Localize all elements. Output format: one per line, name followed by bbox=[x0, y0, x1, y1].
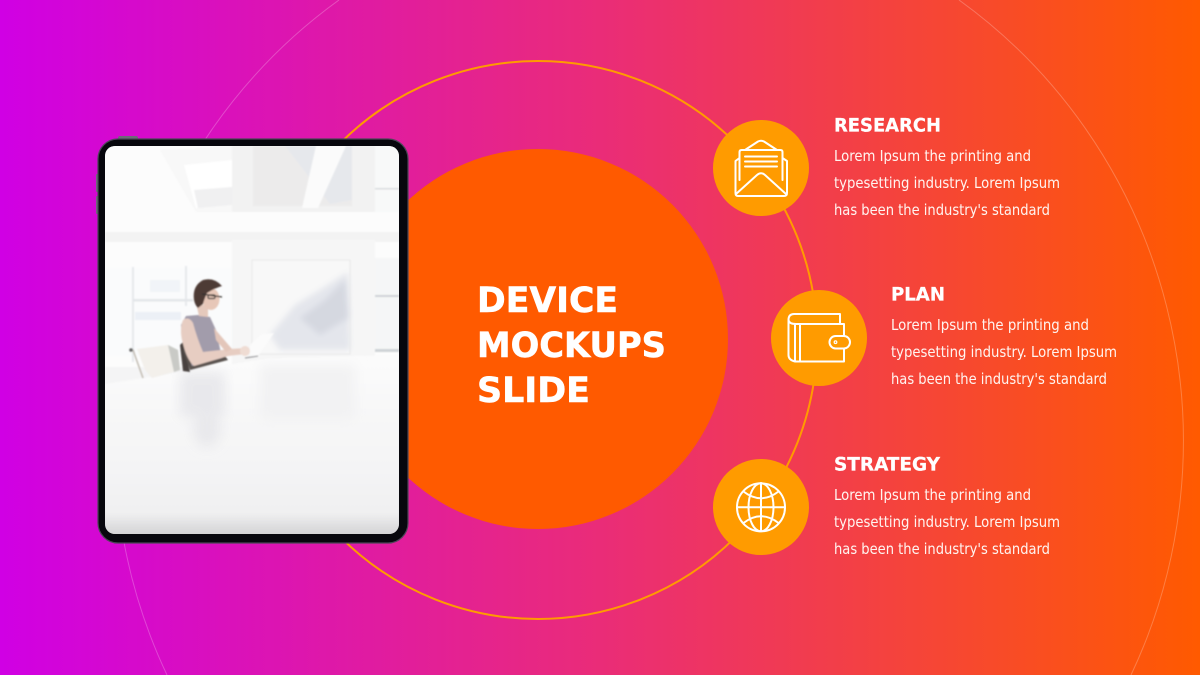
text: strategy description: Lorem Ipsum the printing and bbox=[834, 487, 1031, 504]
reflection on table bbox=[180, 372, 225, 447]
text: plan description: Lorem Ipsum the printing and bbox=[891, 317, 1089, 334]
text: strategy description: has been the industry's standard bbox=[834, 541, 1050, 558]
ceiling bbox=[105, 146, 115, 156]
central orange circle bbox=[348, 149, 728, 529]
chair bbox=[129, 345, 180, 378]
heading: strategy: STRATEGY bbox=[834, 454, 941, 476]
icon: wallet bbox=[771, 290, 867, 386]
step: plan bbox=[771, 284, 1117, 388]
title: DEVICE bbox=[477, 281, 618, 321]
wall and window bbox=[105, 242, 399, 367]
icon: envelope bbox=[713, 120, 809, 216]
woman at the table bbox=[180, 279, 274, 372]
title: SLIDE bbox=[477, 371, 590, 411]
tablet mockup bbox=[96, 136, 408, 543]
tablet side buttons bbox=[96, 136, 138, 214]
text: strategy description bbox=[834, 487, 1060, 558]
step: strategy bbox=[713, 454, 1060, 558]
text: strategy description: typesetting industry. Lorem Ipsum bbox=[834, 514, 1060, 531]
tablet screen photo bbox=[105, 146, 399, 534]
text: research description: Lorem Ipsum the printing and bbox=[834, 148, 1031, 165]
text: plan description: has been the industry's standard bbox=[891, 371, 1107, 388]
text: research description: has been the industry's standard bbox=[834, 202, 1050, 219]
step: research bbox=[713, 116, 1060, 219]
window panes bbox=[105, 268, 232, 356]
table top bbox=[105, 499, 399, 534]
title: MOCKUPS bbox=[477, 326, 666, 366]
text: research description bbox=[834, 148, 1060, 219]
heading: research: RESEARCH bbox=[834, 116, 941, 136]
icon: globe bbox=[713, 459, 809, 555]
title bbox=[477, 281, 666, 411]
text: research description: typesetting industry. Lorem Ipsum bbox=[834, 175, 1060, 192]
text: plan description: typesetting industry. Lorem Ipsum bbox=[891, 344, 1117, 361]
orange ring connecting the steps bbox=[259, 61, 817, 619]
heading: plan: PLAN bbox=[891, 284, 945, 306]
tablet body bbox=[98, 139, 408, 543]
text: plan description bbox=[891, 317, 1117, 388]
beam bbox=[105, 212, 122, 232]
